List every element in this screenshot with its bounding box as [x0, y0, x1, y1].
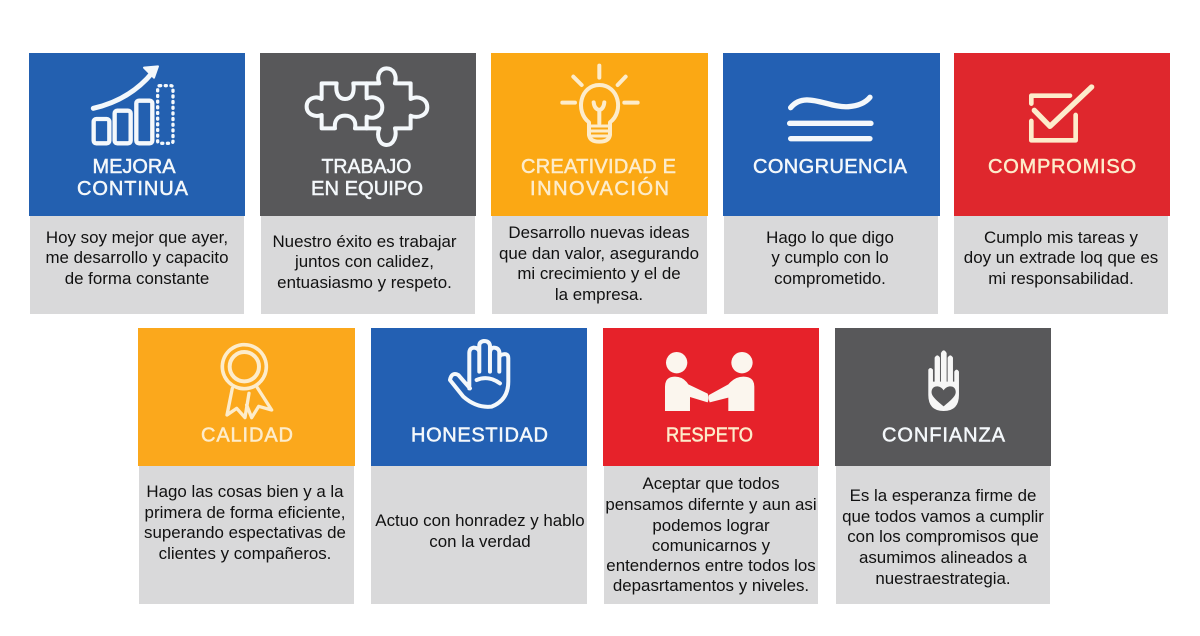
description: mejora continua: Hoy soy mejor que ayer,	[46, 228, 228, 247]
header block: calidad	[138, 328, 355, 466]
description: respeto: Aceptar que todos	[642, 474, 780, 493]
description: creatividad e innovación: que dan valor, asegurando	[499, 244, 699, 263]
panel: congruencia	[723, 53, 940, 314]
panel: respeto	[603, 328, 819, 604]
heading: creatividad e innovación: INNOVACIÓN	[530, 177, 669, 200]
heading: calidad: CALIDAD	[201, 424, 293, 446]
icon: hand with heart	[928, 350, 959, 411]
description: compromiso: mi responsabilidad.	[988, 269, 1134, 288]
description: confianza: que todos vamos a cumplir	[842, 507, 1044, 526]
description: congruencia: Hago lo que digo	[766, 228, 894, 247]
description: creatividad e innovación: la empresa.	[555, 285, 643, 304]
description: mejora continua: de forma constante	[65, 269, 209, 288]
description: congruencia: comprometido.	[774, 269, 886, 288]
heading: trabajo en equipo: TRABAJO	[322, 156, 412, 178]
description: confianza: nuestraestrategia.	[875, 569, 1011, 588]
icon: light bulb	[562, 66, 638, 142]
panel: calidad	[138, 328, 355, 604]
description: creatividad e innovación: mi crecimiento y el de	[517, 264, 681, 283]
description: respeto: pensamos difernte y aun asi	[605, 495, 817, 514]
panel: compromiso	[954, 53, 1170, 314]
header block: congruencia	[723, 53, 940, 216]
icon: handshake	[665, 352, 754, 411]
panel: creatividad e innovación	[491, 53, 708, 314]
panel: trabajo en equipo	[260, 53, 476, 314]
description: mejora continua	[30, 216, 244, 314]
heading: trabajo en equipo: EN EQUIPO	[311, 178, 423, 200]
heading: mejora continua: MEJORA	[92, 156, 176, 178]
header block: confianza	[835, 328, 1051, 466]
description: confianza: con los compromisos que	[847, 527, 1039, 546]
description: respeto: entendernos entre todos los	[606, 556, 816, 575]
heading: respeto: RESPETO	[666, 424, 753, 446]
description: calidad: clientes y compañeros.	[159, 544, 331, 563]
icon: checked box	[1031, 87, 1092, 140]
icon: rosette medal	[222, 345, 272, 418]
description: respeto: comunicarnos y	[652, 536, 771, 555]
panel: mejora continua	[29, 53, 245, 314]
header block: trabajo en equipo	[260, 53, 476, 216]
header block: creatividad e innovación	[491, 53, 708, 216]
description: trabajo en equipo: Nuestro éxito es trabajar	[272, 232, 457, 251]
description: calidad	[139, 466, 354, 604]
heading: compromiso: COMPROMISO	[988, 156, 1136, 178]
panel: honestidad	[371, 328, 587, 604]
icon: growth bar chart with arrow	[93, 66, 173, 143]
description: confianza: Es la esperanza firme de	[850, 486, 1036, 505]
description: mejora continua: me desarrollo y capacito	[45, 248, 229, 267]
panel: confianza	[835, 328, 1051, 604]
description: calidad: Hago las cosas bien y a la	[146, 482, 344, 501]
description: confianza	[836, 466, 1050, 604]
icon: raised hand	[450, 341, 508, 407]
description: creatividad e innovación	[492, 216, 707, 314]
description: creatividad e innovación: Desarrollo nuevas ideas	[508, 223, 690, 242]
header block: compromiso	[954, 53, 1170, 216]
icon: puzzle pieces	[307, 68, 427, 145]
description: trabajo en equipo	[261, 216, 475, 314]
description: compromiso: Cumplo mis tareas y	[984, 228, 1139, 247]
description: trabajo en equipo: entuasiasmo y respeto.	[277, 273, 452, 292]
description: honestidad: con la verdad	[429, 532, 531, 551]
heading: creatividad e innovación	[521, 156, 676, 200]
description: trabajo en equipo: juntos con calidez,	[294, 252, 434, 271]
description: compromiso	[954, 216, 1168, 314]
heading: honestidad: HONESTIDAD	[411, 424, 548, 446]
description: honestidad	[371, 466, 587, 604]
description: respeto	[604, 466, 818, 604]
description: congruencia	[724, 216, 938, 314]
description: compromiso: doy un extrade loq que es	[964, 248, 1158, 267]
description: respeto: podemos lograr	[652, 516, 770, 535]
header block: honestidad	[371, 328, 587, 466]
description: calidad: superando espectativas de	[144, 523, 346, 542]
heading: creatividad e innovación: CREATIVIDAD E	[521, 156, 676, 178]
icon: approximately equal sign	[790, 97, 871, 139]
heading: mejora continua: CONTINUA	[77, 178, 189, 200]
description: congruencia: y cumplo con lo	[771, 248, 889, 267]
heading: mejora continua	[77, 156, 189, 200]
header block: respeto	[603, 328, 819, 466]
description: calidad: primera de forma eficiente,	[145, 503, 345, 522]
heading: congruencia: CONGRUENCIA	[753, 156, 908, 178]
description: respeto: depasrtamentos y niveles.	[613, 576, 809, 595]
heading: trabajo en equipo	[311, 156, 423, 200]
description: honestidad: Actuo con honradez y hablo	[375, 511, 585, 530]
heading: confianza: CONFIANZA	[882, 424, 1006, 446]
header block: mejora continua	[29, 53, 245, 216]
description: confianza: asumimos alineados a	[859, 548, 1028, 567]
